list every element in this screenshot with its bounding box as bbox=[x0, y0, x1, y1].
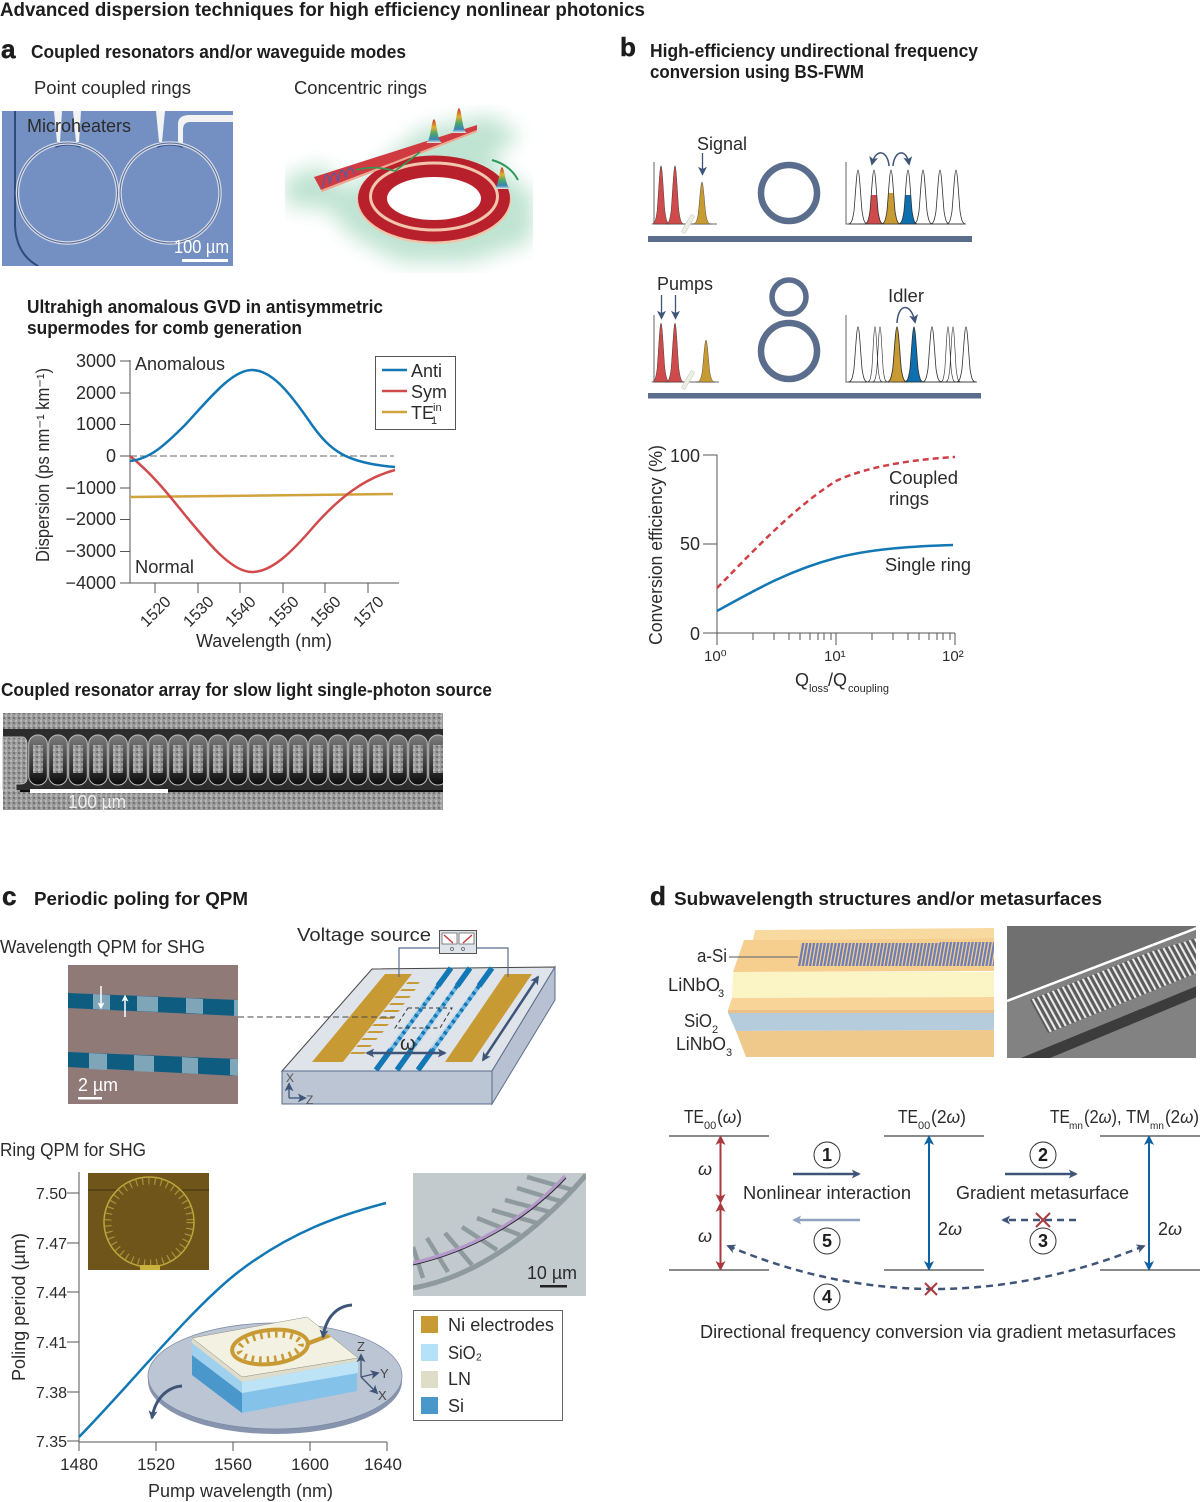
x tick labels: 1550 bbox=[265, 593, 303, 631]
x axis title bbox=[795, 670, 889, 695]
electrodes bbox=[312, 974, 532, 1062]
level labels: (2ω) bbox=[931, 1107, 966, 1127]
micrograph: metasurface SEM bbox=[1007, 926, 1197, 1058]
legend: materials: LN bbox=[448, 1369, 471, 1389]
grating bbox=[797, 942, 994, 966]
step numbers: 4 bbox=[822, 1287, 832, 1307]
x axis title: Pump wavelength (nm) bbox=[148, 1481, 333, 1501]
x tick labels: 1540 bbox=[222, 593, 260, 631]
scale label 10 um: 10 µm bbox=[527, 1263, 577, 1283]
legend: materials: SiO₂ bbox=[448, 1343, 482, 1363]
micrograph: poled waveguides bbox=[68, 965, 238, 1104]
energy diagram: 2ω bbox=[938, 1219, 962, 1239]
chart: dispersion vs wavelength bbox=[33, 351, 456, 651]
heading: ultrahigh anomalous GVD: Ultrahigh anomalous GVD in antisymmetric bbox=[27, 297, 383, 317]
label: coupled rings: rings bbox=[889, 489, 929, 509]
curve: single ring bbox=[717, 545, 953, 611]
material labels: LiNbO bbox=[676, 1034, 726, 1054]
material labels: 3 bbox=[726, 1047, 732, 1059]
arrows: pumps bbox=[662, 295, 676, 318]
level labels: mn bbox=[1150, 1121, 1164, 1132]
axes xz: X bbox=[286, 1071, 294, 1085]
axes bbox=[703, 455, 955, 645]
step numbers: 1 bbox=[822, 1145, 832, 1165]
x tick labels: 1560 bbox=[214, 1455, 252, 1474]
label omega: ω bbox=[400, 1033, 416, 1055]
x tick labels: 1600 bbox=[291, 1455, 329, 1474]
legend: TE bbox=[411, 403, 434, 423]
level labels: TE bbox=[898, 1107, 918, 1127]
label: wavelength QPM: Wavelength QPM for SHG bbox=[0, 937, 205, 957]
energy diagram bbox=[669, 1107, 1200, 1342]
label: point coupled rings: Point coupled rings bbox=[34, 78, 191, 98]
tick labels: 0 bbox=[690, 624, 700, 644]
material labels: LiNbO bbox=[668, 975, 720, 995]
step arrows bbox=[793, 1174, 1076, 1220]
label: voltage source: Voltage source bbox=[297, 925, 431, 945]
y axis title: Poling period (µm) bbox=[9, 1233, 29, 1381]
chart: dispersion vs wavelength: Normal bbox=[135, 557, 194, 577]
x tick labels: 1530 bbox=[180, 593, 218, 631]
x tick labels: 1520 bbox=[137, 1455, 175, 1474]
illustration: layered device bbox=[668, 928, 994, 1059]
heading c: Periodic poling for QPM bbox=[34, 889, 248, 909]
label: pumps: Pumps bbox=[657, 274, 713, 294]
legend: in bbox=[433, 402, 442, 414]
curve bbox=[79, 1203, 386, 1437]
icon: coupled rings bbox=[761, 280, 817, 379]
heading a: Coupled resonators and/or waveguide modes bbox=[31, 42, 406, 62]
panel a: coupled resonators bbox=[1, 34, 533, 266]
panel letter c: c bbox=[2, 881, 16, 911]
x tick labels: 1640 bbox=[364, 1455, 402, 1474]
tick labels: 10² bbox=[942, 648, 964, 665]
spectrum: output single ring bbox=[846, 153, 966, 224]
arrows: conversion bbox=[872, 153, 889, 166]
curve: coupled rings bbox=[717, 457, 955, 588]
illustration: concentric rings bbox=[285, 108, 533, 262]
icon: voltage meter bbox=[440, 930, 476, 954]
captions: Nonlinear interaction bbox=[743, 1183, 911, 1203]
label: single ring: Single ring bbox=[885, 555, 971, 575]
tick labels: 50 bbox=[680, 534, 700, 554]
energy diagram: Gradient metasurface bbox=[956, 1183, 1129, 1203]
axes xyz: Z bbox=[357, 1339, 365, 1354]
scale label 2 um: 2 µm bbox=[78, 1075, 118, 1095]
energy diagram: ω bbox=[698, 1159, 712, 1179]
region labels: Anomalous bbox=[135, 354, 225, 374]
y tick labels bbox=[36, 1186, 67, 1451]
micrograph: coupled resonator array bbox=[3, 713, 443, 812]
y tick labels: −3000 bbox=[65, 541, 116, 561]
label: ring QPM: Ring QPM for SHG bbox=[0, 1140, 146, 1160]
level labels: (ω) bbox=[717, 1107, 742, 1127]
material labels: a-Si bbox=[697, 946, 727, 966]
illustration: poling device bbox=[282, 930, 555, 1107]
transition arrows bbox=[720, 1137, 1149, 1269]
heading b bbox=[650, 41, 978, 82]
y tick labels: 0 bbox=[106, 446, 116, 466]
x axis title: Wavelength (nm) bbox=[196, 631, 332, 651]
level labels: (2ω) bbox=[1165, 1107, 1199, 1127]
step numbers bbox=[814, 1142, 1056, 1310]
level labels: mn bbox=[1069, 1121, 1083, 1132]
curves bbox=[130, 494, 393, 497]
x axis title: Q bbox=[795, 670, 809, 690]
dashed guide line bbox=[238, 1016, 395, 1018]
tick labels: 100 bbox=[670, 446, 700, 466]
curved dashed arrow bbox=[728, 1246, 1144, 1289]
wires bbox=[399, 948, 508, 977]
axes xyz: X bbox=[378, 1388, 387, 1403]
panel letter a: a bbox=[1, 34, 16, 64]
title: Advanced dispersion techniques for high efficiency nonlinear photonics bbox=[0, 0, 645, 21]
micrograph: point coupled rings bbox=[2, 111, 233, 266]
y tick labels: −1000 bbox=[65, 478, 116, 498]
y tick labels: −2000 bbox=[65, 509, 116, 529]
legend: materials: Si bbox=[448, 1396, 464, 1416]
waveguide bar: top bbox=[648, 236, 972, 242]
micrograph: ring electrode bbox=[88, 1173, 209, 1270]
illustration: poled chip on wafer bbox=[148, 1305, 402, 1434]
scale label: 100 µm bbox=[68, 792, 126, 812]
scale label 100 um: 100 µm bbox=[174, 237, 229, 257]
label: idler: Idler bbox=[888, 286, 924, 306]
step numbers: 3 bbox=[1038, 1231, 1048, 1251]
waveguides bbox=[376, 968, 492, 1070]
energy diagram: Directional frequency conversion via gradient metasurfaces bbox=[700, 1322, 1176, 1342]
level labels: 00 bbox=[918, 1120, 930, 1132]
legend: Anti bbox=[411, 361, 442, 381]
material labels: 2 bbox=[712, 1024, 718, 1036]
electrode bbox=[230, 1326, 310, 1368]
step numbers: 2 bbox=[1038, 1145, 1048, 1165]
heading: ultrahigh anomalous GVD bbox=[27, 297, 383, 338]
legend: Sym bbox=[411, 382, 447, 402]
y tick labels: 3000 bbox=[76, 351, 116, 371]
axes xz: Z bbox=[306, 1093, 313, 1107]
heading: ultrahigh anomalous GVD: supermodes for comb generation bbox=[27, 318, 302, 338]
tick labels: 10¹ bbox=[824, 648, 846, 665]
x axis title: loss bbox=[809, 683, 829, 695]
x tick labels: 1560 bbox=[307, 593, 345, 631]
y tick labels: 1000 bbox=[76, 414, 116, 434]
arrows: poling contacts bbox=[152, 1305, 352, 1418]
chart: conversion efficiency bbox=[646, 445, 971, 695]
y tick labels: 7.41 bbox=[36, 1335, 67, 1352]
label: coupled rings: Coupled bbox=[889, 468, 958, 488]
label: coupled rings bbox=[889, 468, 958, 509]
arrow: signal bbox=[702, 153, 704, 174]
x tick labels: 1570 bbox=[350, 593, 388, 631]
spectrum: input single ring bbox=[652, 134, 747, 234]
legend bbox=[376, 356, 456, 430]
level labels: TE bbox=[1050, 1107, 1070, 1127]
heading b: conversion using BS-FWM bbox=[650, 62, 864, 82]
x tick labels bbox=[137, 593, 388, 631]
micrograph: poled ring SEM bbox=[413, 1173, 586, 1296]
levels bbox=[669, 1136, 1200, 1270]
tick labels bbox=[670, 446, 964, 665]
legend: 1 bbox=[431, 415, 437, 427]
axes bbox=[67, 1172, 387, 1451]
y tick labels: 7.35 bbox=[36, 1434, 67, 1451]
level labels bbox=[684, 1107, 1199, 1132]
x axis title: coupling bbox=[848, 683, 889, 695]
step numbers: 5 bbox=[822, 1231, 832, 1251]
waveguide bar: bottom bbox=[648, 393, 981, 398]
energy diagram: ω bbox=[698, 1226, 712, 1246]
x tick labels: 1520 bbox=[137, 593, 175, 631]
axes xz bbox=[286, 1071, 313, 1107]
material labels: 3 bbox=[718, 988, 724, 1000]
arrow: idler bbox=[897, 307, 915, 323]
y tick labels: 7.38 bbox=[36, 1385, 67, 1402]
panel letter d: d bbox=[650, 881, 666, 911]
chart: poling period bbox=[9, 1172, 402, 1501]
material labels bbox=[668, 946, 798, 1059]
y tick labels: 7.50 bbox=[36, 1186, 67, 1203]
tick labels: 10⁰ bbox=[704, 648, 727, 665]
label: signal: Signal bbox=[697, 134, 747, 154]
y axis title: Dispersion (ps nm⁻¹ km⁻¹) bbox=[33, 368, 53, 562]
spectrum: input coupled rings bbox=[652, 274, 719, 390]
panel d: metasurfaces bbox=[650, 881, 1200, 1342]
label: concentric rings: Concentric rings bbox=[294, 78, 427, 98]
x tick labels bbox=[60, 1455, 402, 1474]
material labels: SiO bbox=[684, 1011, 712, 1031]
icon: single ring bbox=[761, 165, 817, 221]
label: microheaters: Microheaters bbox=[27, 116, 131, 136]
y tick labels bbox=[65, 351, 116, 593]
arrows: field and length bbox=[367, 977, 538, 1060]
axes xyz: Y bbox=[380, 1366, 389, 1381]
panel c: periodic poling bbox=[0, 881, 586, 1501]
y tick labels: 2000 bbox=[76, 383, 116, 403]
level labels: 00 bbox=[704, 1120, 716, 1132]
legend: materials bbox=[414, 1310, 562, 1420]
panel b: BS-FWM bbox=[620, 32, 981, 695]
level labels: TE bbox=[684, 1107, 704, 1127]
heading d: Subwavelength structures and/or metasurfaces bbox=[674, 889, 1102, 909]
y tick labels: 7.47 bbox=[36, 1236, 67, 1253]
heading: coupled resonator array: Coupled resonator array for slow light single-photon source bbox=[1, 680, 492, 700]
x axis title: /Q bbox=[828, 670, 847, 690]
axes xyz bbox=[357, 1339, 389, 1403]
y axis title: Conversion efficiency (%) bbox=[646, 445, 666, 645]
energy diagram: 2ω bbox=[1158, 1219, 1182, 1239]
panel letter b: b bbox=[620, 32, 636, 62]
spectrum: output coupled rings bbox=[846, 286, 977, 382]
x tick labels: 1480 bbox=[60, 1455, 98, 1474]
legend: materials: Ni electrodes bbox=[448, 1315, 554, 1335]
level labels: (2ω), TM bbox=[1084, 1107, 1150, 1127]
y tick labels: −4000 bbox=[65, 573, 116, 593]
heading b: High-efficiency undirectional frequency bbox=[650, 41, 978, 61]
y tick labels: 7.44 bbox=[36, 1285, 67, 1302]
axes bbox=[120, 360, 399, 593]
